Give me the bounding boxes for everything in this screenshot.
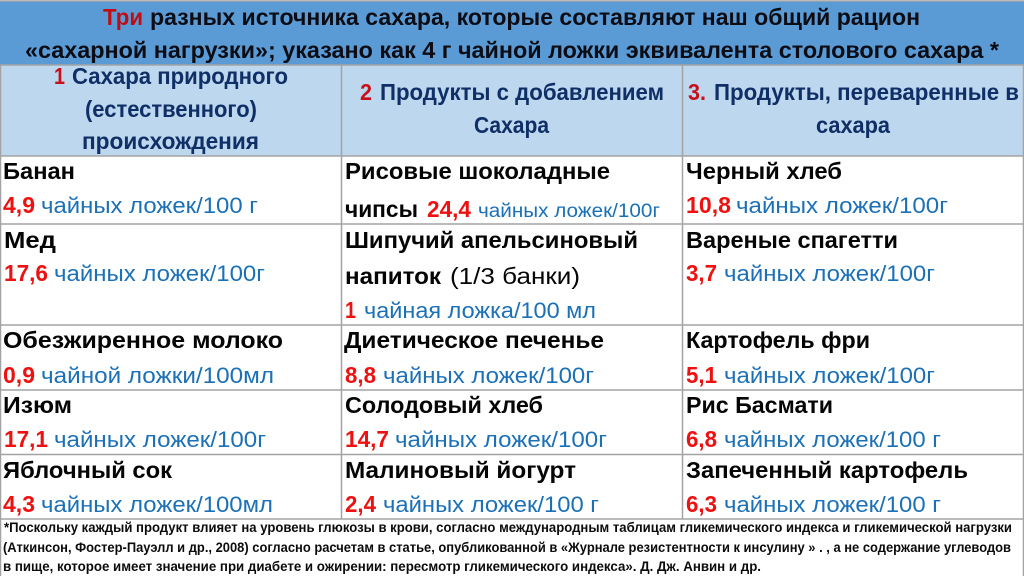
title banner <box>0 1 1024 65</box>
row 4: Изюм <box>3 392 72 418</box>
row 3: чайной ложки/100мл <box>41 363 274 388</box>
row 1: 4,9 <box>3 192 35 218</box>
row 4: чайных ложек/100 г <box>724 427 941 452</box>
row 5: 6,3 <box>686 491 717 517</box>
row 2: 3,7 <box>686 260 717 286</box>
row 1: чайных ложек/100 г <box>41 193 258 218</box>
column header: natural sugars: 1 <box>54 63 65 89</box>
row 1: чайных ложек/100г <box>736 193 948 218</box>
column header: products with added sugar: Сахара <box>474 112 549 138</box>
column header: natural sugars: (естественного) <box>85 96 257 122</box>
column header: products with added sugar <box>342 65 682 156</box>
row 3: Обезжиренное молоко <box>3 327 283 353</box>
row 4: 14,7 <box>345 426 389 452</box>
row 3: 5,1 <box>686 362 717 388</box>
row 5: Яблочный сок <box>3 457 173 483</box>
title banner: «сахарной нагрузки»; указано как 4 г чайной ложки эквивалента столового сахара * <box>25 37 999 63</box>
row 2: Мед <box>4 227 56 253</box>
row 3 <box>3 327 935 388</box>
title banner: Три <box>103 4 143 30</box>
row 3: Диетическое печенье <box>344 327 604 353</box>
row 3: чайных ложек/100г <box>724 363 935 388</box>
row 3: чайных ложек/100г <box>383 363 594 388</box>
row 1: 24,4 <box>427 196 471 222</box>
row 4: 6,8 <box>686 426 717 452</box>
row 3: Картофель фри <box>686 327 870 353</box>
row 5: чайных ложек/100мл <box>41 492 273 517</box>
row 2: 1 <box>345 297 356 323</box>
footnote: в пище, которое имеет значение при диабете и ожирении: пересмотр гликемического индекса». Д. Дж. Анвин и др. <box>3 558 761 574</box>
row 4: чайных ложек/100г <box>54 427 266 452</box>
column header: products with added sugar: 2 <box>360 79 372 105</box>
row 2: напиток <box>345 263 441 289</box>
row 4: Солодовый хлеб <box>345 392 543 418</box>
row 5: Малиновый йогурт <box>345 457 576 483</box>
row 4: 17,1 <box>4 426 48 452</box>
row 1: Черный хлеб <box>686 158 842 184</box>
row 2 <box>4 227 935 323</box>
column header: foods digested into sugar: сахара <box>816 112 890 138</box>
row 5: чайных ложек/100 г <box>383 492 599 517</box>
column header: foods digested into sugar: 3. <box>688 79 706 105</box>
row 1: Рисовые шоколадные <box>345 158 610 184</box>
row 2: чайных ложек/100г <box>724 261 935 286</box>
row 5: 2,4 <box>345 491 376 517</box>
row 2: Вареные спагетти <box>686 227 898 253</box>
column header: products with added sugar: Продукты с добавлением <box>380 79 664 105</box>
row 2: 17,6 <box>4 260 48 286</box>
column header: foods digested into sugar: Продукты, переваренные в <box>714 79 1019 105</box>
row 1: Банан <box>3 158 75 184</box>
row 4: Рис Басмати <box>686 392 833 418</box>
row 1: 10,8 <box>686 192 731 218</box>
row 1: чипсы <box>345 196 418 222</box>
row 5: Запеченный картофель <box>686 457 968 483</box>
title banner: разных источника сахара, которые составляют наш общий рацион <box>150 4 920 30</box>
row 4 <box>3 392 941 452</box>
row 5 <box>3 457 968 517</box>
column header: natural sugars: происхождения <box>82 128 259 154</box>
row 5: 4,3 <box>3 491 35 517</box>
footnote <box>3 519 1012 574</box>
row 2: чайных ложек/100г <box>54 261 265 286</box>
column header: natural sugars <box>0 63 341 156</box>
row 3: 0,9 <box>3 362 35 388</box>
column header: natural sugars: Сахара природного <box>72 63 288 89</box>
row 2: (1/3 банки) <box>450 263 580 289</box>
row 2: Шипучий апельсиновый <box>345 227 638 253</box>
row 2: чайная ложка/100 мл <box>364 298 596 323</box>
row 1 <box>3 158 948 222</box>
row 1: чайных ложек/100г <box>478 201 660 222</box>
row 4: чайных ложек/100г <box>395 427 607 452</box>
row 3: 8,8 <box>345 362 376 388</box>
row 5: чайных ложек/100 г <box>724 492 941 517</box>
column header: foods digested into sugar <box>683 65 1024 156</box>
